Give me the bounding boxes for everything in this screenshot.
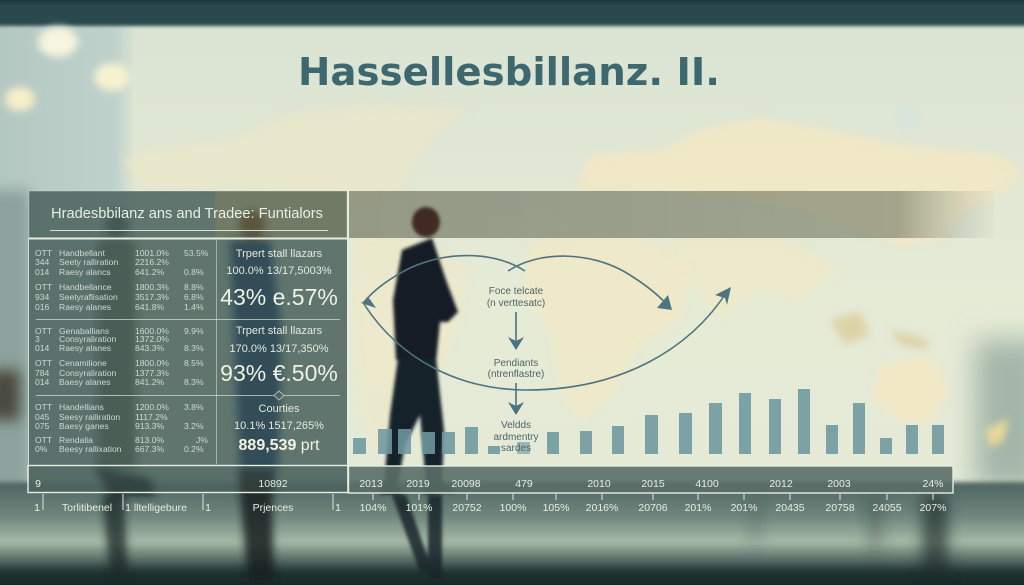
floor shadows <box>750 495 948 580</box>
axis labels: 100% <box>500 502 526 514</box>
row group 2 <box>35 282 204 312</box>
row group 3: 1372.0% <box>135 334 169 344</box>
row group 3: 014 <box>35 343 50 353</box>
row group 6: J% <box>196 435 208 445</box>
axis labels: 201% <box>731 502 757 514</box>
flow label: bottom: sardes <box>501 443 531 454</box>
row group 2: 3517.3% <box>135 292 169 302</box>
row group 2: 1.4% <box>184 302 204 312</box>
arc arrowheads <box>361 287 731 310</box>
row group 1: 1001.0% <box>135 248 169 258</box>
row group 5: Seesy railiration <box>59 412 120 422</box>
stat: block 3: Courties <box>259 403 300 415</box>
bottom strip: 2013 <box>359 478 383 490</box>
row group 4: OTT <box>35 358 53 368</box>
axis labels: 1 <box>205 502 211 514</box>
stat: block 2: 170.0% 13/17,350% <box>229 343 329 355</box>
row group 1: 344 <box>35 257 50 267</box>
row group 6: 813.0% <box>135 435 165 445</box>
stat: block 2 <box>220 325 338 386</box>
axis labels: 201% <box>685 502 711 514</box>
silhouette: ghost person left <box>95 211 156 575</box>
row group 2: 934 <box>35 292 50 302</box>
bottom strip: 4100 <box>695 478 719 490</box>
row group 3: 9.9% <box>184 326 204 336</box>
row group 5: Baesy ganes <box>59 421 109 431</box>
row group 5: Handellians <box>59 402 104 412</box>
row group 1: 641.2% <box>135 267 165 277</box>
flow label: middle: (ntrenflastre) <box>488 369 544 380</box>
row group 3: Genaballians <box>59 326 109 336</box>
row group 6: 667.3% <box>135 444 165 454</box>
axis labels: 1 <box>34 502 40 514</box>
stat: block 1: Trpert stall llazars <box>236 248 323 260</box>
row group 3: Raesy alanes <box>59 343 111 353</box>
row group 6 <box>35 435 208 454</box>
bottom strip: 2015 <box>641 478 665 490</box>
row group 2: Raesy alanes <box>59 302 111 312</box>
stat: block 1: 43% e.57% <box>220 284 338 310</box>
axis labels: 105% <box>543 502 569 514</box>
flow label: top: Foce telcate <box>489 286 544 297</box>
axis labels: Torlitibenel <box>62 502 112 514</box>
row group 3: Consyraliration <box>59 334 117 344</box>
flow label: bottom: ardmentry <box>493 432 539 443</box>
flow arrow: middle to bottom <box>508 383 524 415</box>
axis labels: 20435 <box>775 502 805 514</box>
bottom strip: 2010 <box>587 478 611 490</box>
row group 3: 1600.0% <box>135 326 169 336</box>
row group 6: 0.2% <box>184 444 204 454</box>
panel heading: Hradesbbilanz ans and Tradee: Funtialors <box>51 206 323 222</box>
stat: block 2: 93% €.50% <box>220 360 338 386</box>
flow arrow: top to middle <box>508 312 524 350</box>
bottom strip: 2012 <box>769 478 793 490</box>
row group 5: 913.3% <box>135 421 165 431</box>
row group 4: 8.3% <box>184 377 204 387</box>
flow label: bottom <box>493 420 539 454</box>
stat: block 2: Trpert stall llazars <box>236 325 323 337</box>
row group 1: Handbellant <box>59 248 105 258</box>
row group 4: 8.5% <box>184 358 204 368</box>
row group 5: 3.2% <box>184 421 204 431</box>
header band over map <box>349 191 994 238</box>
stat: block 3 <box>234 403 324 454</box>
row group 1: Raesy alancs <box>59 267 111 277</box>
row group 4: Baesy alanes <box>59 377 111 387</box>
bottom strip: 24% <box>922 478 944 490</box>
row group 4: 784 <box>35 368 50 378</box>
bottom strip: 9 <box>35 478 41 490</box>
left data panel background <box>29 191 347 492</box>
axis labels: 2016% <box>586 502 618 514</box>
axis labels <box>34 494 946 514</box>
stat: block 1 <box>220 248 338 310</box>
bottom strip: 479 <box>515 478 533 490</box>
title: Hassellesbillanz. II. <box>298 50 720 94</box>
row group 4: 1377.3% <box>135 368 169 378</box>
axis labels: 207% <box>920 502 946 514</box>
row group 4: 1800.0% <box>135 358 169 368</box>
row group 5: 1200.0% <box>135 402 169 412</box>
stat: block 3: 889,539 prt <box>239 437 320 454</box>
axis labels: 104% <box>360 502 386 514</box>
row group 5: 3.8% <box>184 402 204 412</box>
row group 1: 2216.2% <box>135 257 169 267</box>
axis labels: 20752 <box>452 502 482 514</box>
row group 2: Handbellance <box>59 282 112 292</box>
row group 5: OTT <box>35 402 53 412</box>
bottom strip: 2003 <box>827 478 851 490</box>
row group 1 <box>35 248 209 277</box>
row group 1: Seety ralliration <box>59 257 118 267</box>
row group 1: 014 <box>35 267 50 277</box>
left panel frame lines <box>28 191 348 492</box>
row group 5: 045 <box>35 412 50 422</box>
axis labels: 1 lltelligebure <box>125 502 187 514</box>
row group 1: 0.8% <box>184 267 204 277</box>
row group 5: 075 <box>35 421 50 431</box>
bottom strip: 2019 <box>406 478 430 490</box>
flow label: middle <box>488 358 544 380</box>
row group 5 <box>35 402 204 431</box>
row group 1: 53.5% <box>184 248 209 258</box>
row group 6: OTT <box>35 435 53 445</box>
axis labels: 101% <box>406 502 432 514</box>
axis labels: Prjences <box>253 502 293 514</box>
row group 4: Cenamilione <box>59 358 107 368</box>
row group 4 <box>35 358 204 387</box>
row group 3: 843.3% <box>135 343 165 353</box>
axis labels: 24055 <box>872 502 902 514</box>
row group 1: OTT <box>35 248 53 258</box>
axis labels: 1 <box>335 502 341 514</box>
row group 4: 014 <box>35 377 50 387</box>
row group 3 <box>35 326 204 353</box>
bar chart <box>353 389 944 454</box>
row group 4: 841.2% <box>135 377 165 387</box>
row group 2: 1800.3% <box>135 282 169 292</box>
row group 3: OTT <box>35 326 53 336</box>
flow arcs <box>364 256 728 390</box>
row group 3: 8.3% <box>184 343 204 353</box>
row group 4: Consyraliration <box>59 368 117 378</box>
row group 2: Seetyraflisation <box>59 292 118 302</box>
world map <box>122 105 1024 450</box>
flow label: middle: Pendiants <box>494 358 538 369</box>
row group 6: Rendalia <box>59 435 93 445</box>
row group 3: 3 <box>35 334 40 344</box>
flow label: top <box>487 286 545 309</box>
bottom strip <box>28 466 953 493</box>
stat: block 1: 100.0% 13/17,5003% <box>226 265 332 277</box>
row group 2: OTT <box>35 282 53 292</box>
row group 2: 8.8% <box>184 282 204 292</box>
row dividers <box>36 320 340 400</box>
flow label: bottom: Veldds <box>501 420 531 431</box>
row group 6: 0% <box>35 444 48 454</box>
row group 2: 016 <box>35 302 50 312</box>
flow label: top: (n verttesatc) <box>487 298 545 309</box>
row group 2: 641.8% <box>135 302 165 312</box>
row group 2: 6.8% <box>184 292 204 302</box>
silhouette: main walking person <box>380 207 458 578</box>
row group 6: Beesy rallixation <box>59 444 122 454</box>
table rows <box>35 248 209 454</box>
bottom strip: 20098 <box>451 478 481 490</box>
stat: block 3: 10.1% 1517,265% <box>234 420 324 432</box>
axis labels: 20758 <box>825 502 855 514</box>
axis labels: 20706 <box>638 502 668 514</box>
row group 5: 1117.2% <box>135 412 168 422</box>
silhouette: ghost person centre-left <box>230 210 282 582</box>
bottom strip: 10892 <box>258 478 288 490</box>
